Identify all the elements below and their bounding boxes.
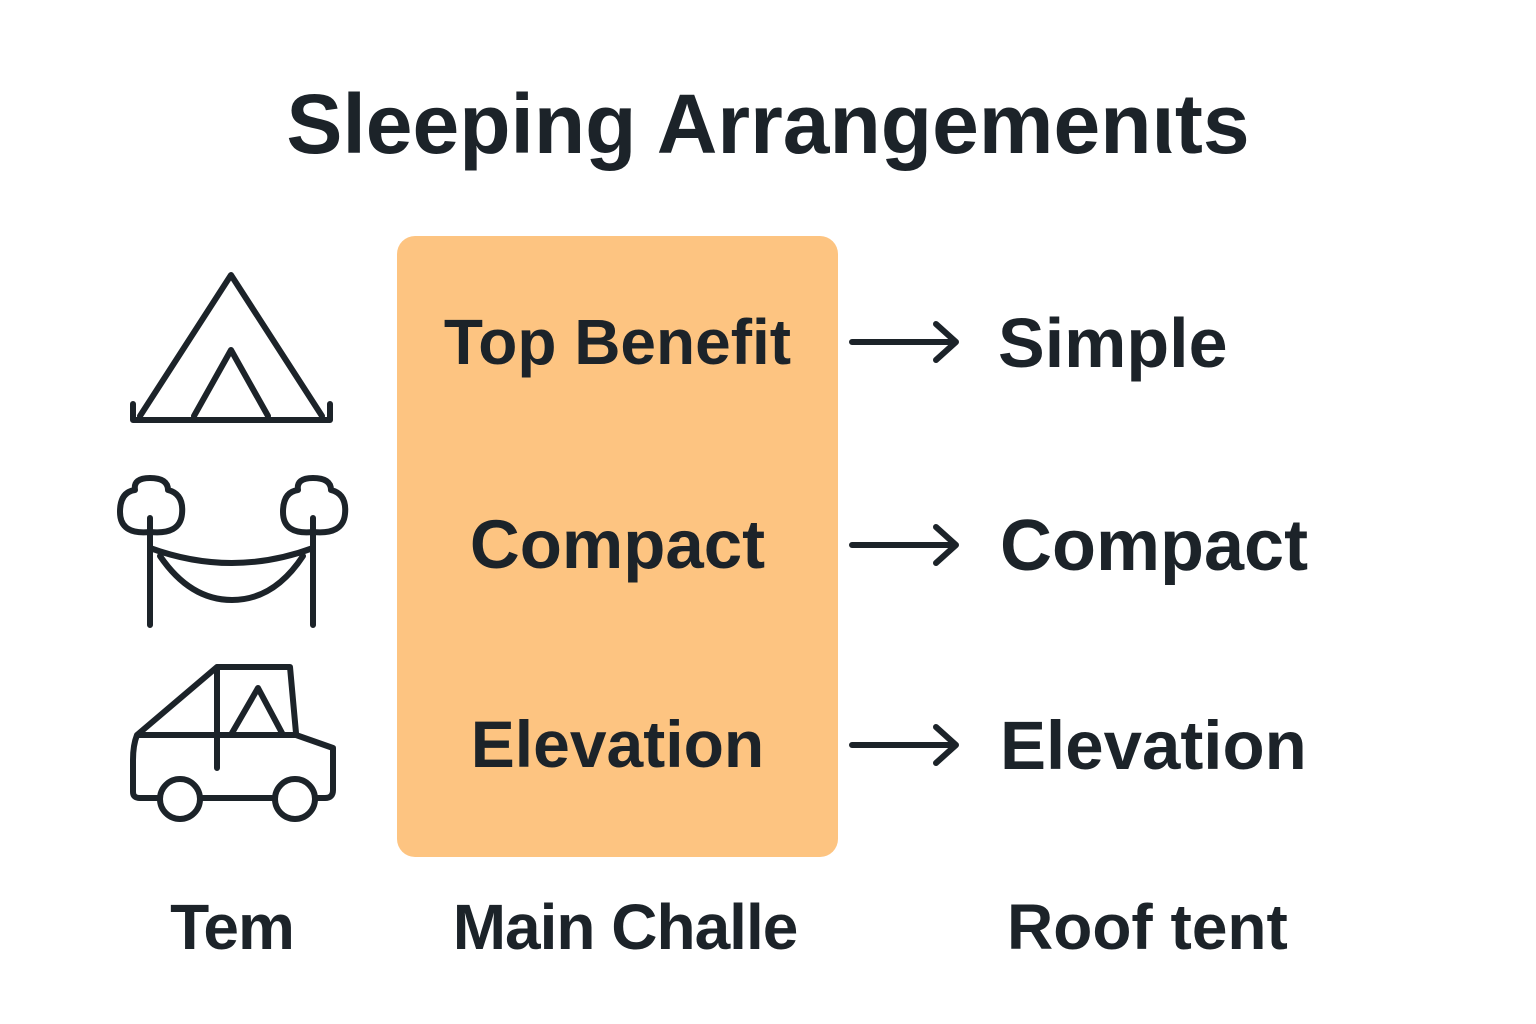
- text: Compact: Compact: [470, 506, 765, 583]
- text: Elevation right: Elevation: [1000, 707, 1307, 784]
- panel: orange box: [397, 236, 838, 857]
- text: Elevation: Elevation: [471, 707, 764, 781]
- icon: tent: [133, 275, 330, 420]
- text: Top Benefit: Top Benefit: [444, 306, 791, 378]
- icon: car with roof tent: [133, 667, 333, 819]
- label: Tem: Tem: [170, 891, 294, 963]
- label: Roof tent: Roof tent: [1007, 891, 1288, 963]
- text: Compact right: Compact: [1000, 506, 1308, 586]
- title: Sleeping Arrangemenιts: [286, 77, 1250, 171]
- icon: hammock: [120, 478, 345, 625]
- label: Main Challe: Main Challe: [453, 891, 797, 963]
- text: Simple: Simple: [998, 304, 1228, 382]
- arrow 1: [852, 324, 956, 360]
- arrow 2: [852, 527, 956, 563]
- arrow 3: [852, 727, 956, 763]
